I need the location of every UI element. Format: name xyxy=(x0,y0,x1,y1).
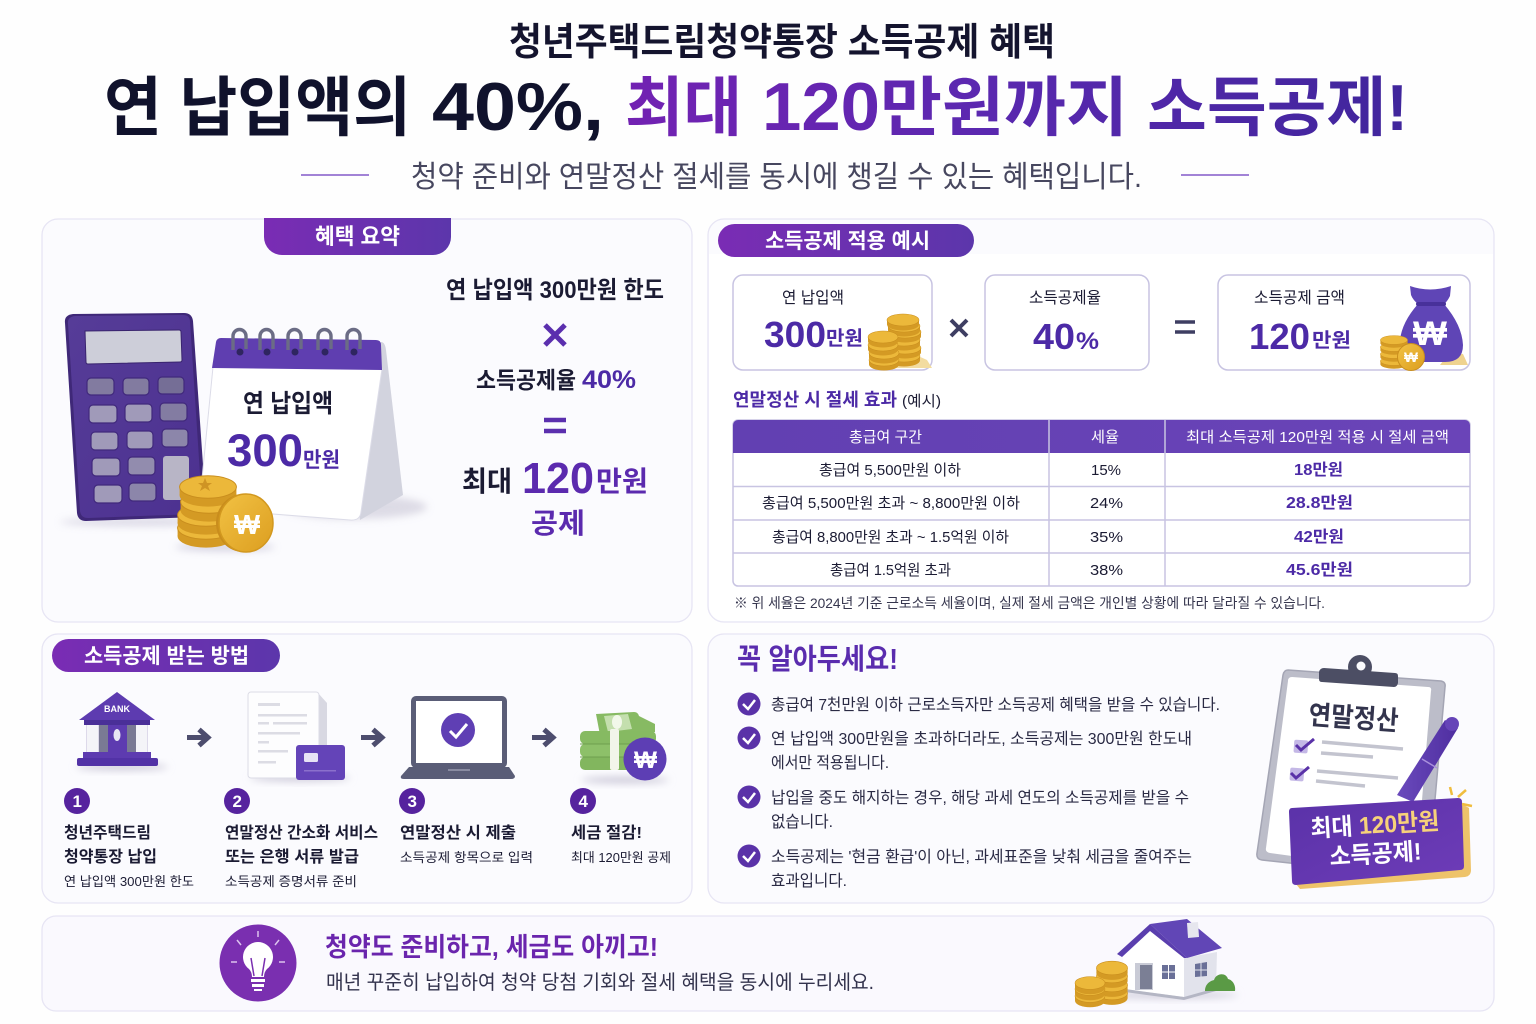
step 1: 연 납입액 300만원 한도 xyxy=(64,874,194,889)
step 3 xyxy=(399,788,533,865)
table: tax savings by income bracket xyxy=(733,420,1470,586)
table row 3: 총급여 8,800만원 초과 ~ 1.5억원 이하 xyxy=(772,529,1009,546)
headline: 최대 xyxy=(625,71,742,144)
table row 1: 18만원 xyxy=(1294,461,1343,479)
table row 1 xyxy=(819,461,1343,479)
formula: annual limit: 연 납입액 300만원 한도 xyxy=(446,277,664,304)
icon: documents and card xyxy=(248,692,350,781)
pill heading: benefit summary xyxy=(264,218,451,255)
card: deduction rate: % xyxy=(1076,328,1099,355)
card: deduction rate xyxy=(985,275,1149,370)
callout: max 120 deduction xyxy=(1289,787,1472,889)
table header: 총급여 구간 xyxy=(849,429,922,446)
footnote: ※ 위 세율은 2024년 기준 근로소득 세율이며, 실제 절세 금액은 개인별 상황에 따라 달라질 수 있습니다. xyxy=(734,595,1325,611)
panel: how to receive xyxy=(42,634,692,903)
table row 4: 45.6만원 xyxy=(1286,561,1353,579)
table row 2: 28.8만원 xyxy=(1286,494,1353,512)
item 4: 효과입니다. xyxy=(771,872,847,890)
formula: maximum result: 120 xyxy=(522,454,594,503)
headline: 소득공제! xyxy=(1147,71,1408,144)
icon: clipboard: 연말정산 xyxy=(1308,700,1400,736)
banner message: 매년 꾸준히 납입하여 청약 당첨 기회와 절세 혜택을 동시에 누리세요. xyxy=(326,971,874,994)
step 2: 또는 은행 서류 발급 xyxy=(225,847,359,866)
formula: maximum result: 최대 xyxy=(462,466,512,497)
panel: things to know xyxy=(708,634,1494,903)
headline xyxy=(104,69,1408,145)
formula: deduction rate: 소득공제율 xyxy=(476,367,576,393)
item 3: 없습니다. xyxy=(771,813,833,831)
step 2: 연말정산 간소화 서비스 xyxy=(225,824,378,842)
arrow 2 xyxy=(361,730,382,746)
icon: coin stacks xyxy=(868,314,932,370)
icon: cash and won coin xyxy=(580,712,669,783)
item 2: 에서만 적용됩니다. xyxy=(771,754,889,772)
heading: things to know: 꼭 알아두세요! xyxy=(737,643,898,676)
card: deduction rate: 40 xyxy=(1033,316,1075,357)
callout: max 120 deduction: 최대 120만원 xyxy=(1310,808,1440,843)
pill heading: how to receive xyxy=(52,639,280,672)
step 2 xyxy=(224,788,378,889)
icon: laptop with check xyxy=(401,696,515,779)
table row 3: 42만원 xyxy=(1294,528,1344,546)
subheading: tax saving effect: 연말정산 시 절세 효과 xyxy=(733,390,897,410)
icon: bank xyxy=(76,692,168,770)
headline: 120 xyxy=(762,69,880,145)
icon: desk calendar: 만원 xyxy=(303,449,340,472)
table row 1: 총급여 5,500만원 이하 xyxy=(819,462,961,479)
icon: equals sign xyxy=(544,420,566,431)
step 3: 3 xyxy=(408,792,417,811)
step 4 xyxy=(570,788,671,865)
pill heading: benefit summary: 혜택 요약 xyxy=(315,224,400,249)
formula: maximum result: 공제 xyxy=(531,508,585,539)
formula: deduction rate: 40% xyxy=(582,366,636,394)
card: deduction amount: 만원 xyxy=(1312,329,1351,352)
table row 2: 24% xyxy=(1090,495,1123,512)
operator: equals xyxy=(1175,322,1195,332)
headline: 40%, xyxy=(432,69,604,145)
icon: gold coins: ₩ xyxy=(234,509,261,540)
item 3 xyxy=(738,786,1189,831)
icon: gold coins xyxy=(175,476,275,552)
pill heading: application example: 소득공제 적용 예시 xyxy=(765,230,930,253)
step 1: 1 xyxy=(72,792,82,811)
formula: maximum result: 만원 xyxy=(596,466,648,497)
step 3: 소득공제 항목으로 입력 xyxy=(400,850,533,865)
table row 2: 총급여 5,500만원 초과 ~ 8,800만원 이하 xyxy=(762,495,1020,512)
headline: 만원까지 xyxy=(880,71,1128,144)
banner headline: 청약도 준비하고, 세금도 아끼고! xyxy=(325,932,658,962)
pill heading: how to receive: 소득공제 받는 방법 xyxy=(84,645,249,668)
step 1: 청약통장 납입 xyxy=(64,848,157,866)
item 4 xyxy=(738,844,1192,890)
step 2: 2 xyxy=(232,792,242,811)
item 4: 소득공제는 '현금 환급'이 아닌, 과세표준을 낮춰 세금을 줄여주는 xyxy=(771,848,1192,866)
formula: deduction rate xyxy=(476,366,636,394)
title: 청년주택드림청약통장 소득공제 혜택 xyxy=(509,22,1055,64)
subheading: tax saving effect: (예시) xyxy=(902,393,941,410)
icon: calculator xyxy=(60,313,220,526)
formula: maximum result xyxy=(462,454,648,539)
table row 4: 38% xyxy=(1090,562,1123,579)
icon: desk calendar: 300 xyxy=(227,425,303,476)
item 3: 납입을 중도 해지하는 경우, 해당 과세 연도의 소득공제를 받을 수 xyxy=(771,789,1189,807)
icon: pen xyxy=(1397,717,1459,802)
table row 3: 35% xyxy=(1090,529,1123,546)
step 4: 최대 120만원 공제 xyxy=(571,850,671,865)
card: deduction rate: 소득공제율 xyxy=(1029,289,1101,307)
icon: money bag: ₩ xyxy=(1404,349,1419,365)
table header xyxy=(849,429,1449,446)
card: deduction amount: 소득공제 금액 xyxy=(1254,289,1345,307)
step 4: 세금 절감! xyxy=(571,824,642,842)
icon: desk calendar xyxy=(200,330,427,520)
card: annual payment: 300 xyxy=(764,314,826,355)
operator: multiply xyxy=(951,320,967,336)
step 2: 소득공제 증명서류 준비 xyxy=(225,874,357,889)
icon: desk calendar: 연 납입액 xyxy=(243,390,333,418)
table header: 최대 소득공제 120만원 적용 시 절세 금액 xyxy=(1186,429,1449,446)
icon: cash and won coin: ₩ xyxy=(634,747,657,774)
step 1: 청년주택드림 xyxy=(64,824,151,842)
arrow 1 xyxy=(187,730,208,746)
callout: max 120 deduction: 소득공제! xyxy=(1329,838,1422,871)
table row 4 xyxy=(830,561,1353,579)
panel: benefit summary xyxy=(42,218,692,622)
card: deduction amount: 120 xyxy=(1249,316,1310,357)
panel: application example xyxy=(708,219,1494,622)
icon: bank: BANK xyxy=(104,704,130,714)
table row 2 xyxy=(762,494,1353,512)
step 1 xyxy=(64,788,194,889)
item 2 xyxy=(738,726,1192,772)
item 1: 총급여 7천만원 이하 근로소득자만 소득공제 혜택을 받을 수 있습니다. xyxy=(771,696,1220,714)
headline: 연 납입액의 xyxy=(104,71,411,144)
arrow 3 xyxy=(532,730,553,746)
card: annual payment xyxy=(733,275,932,370)
table row 1: 15% xyxy=(1091,462,1121,479)
item 1 xyxy=(738,692,1220,716)
icon: clipboard xyxy=(1257,655,1459,878)
card: deduction amount xyxy=(1218,275,1470,370)
step 3: 연말정산 시 제출 xyxy=(400,824,516,842)
icon: money bag: ₩ xyxy=(1413,315,1448,353)
pill heading: application example xyxy=(718,224,974,257)
panel: closing banner xyxy=(42,916,1494,1011)
table row 3 xyxy=(772,528,1344,546)
icon: multiply sign xyxy=(545,325,565,345)
icon: money bag xyxy=(1380,286,1468,370)
step 4: 4 xyxy=(578,792,588,811)
item 2: 연 납입액 300만원을 초과하더라도, 소득공제는 300만원 한도내 xyxy=(771,730,1192,748)
card: annual payment: 만원 xyxy=(826,327,863,350)
table row 4: 총급여 1.5억원 초과 xyxy=(830,562,951,579)
subtitle: 청약 준비와 연말정산 절세를 동시에 챙길 수 있는 혜택입니다. xyxy=(411,161,1142,194)
table header: 세율 xyxy=(1091,429,1119,446)
icon: house with coins xyxy=(1075,919,1238,1007)
icon: light bulb xyxy=(220,924,296,1002)
card: annual payment: 연 납입액 xyxy=(782,289,844,307)
